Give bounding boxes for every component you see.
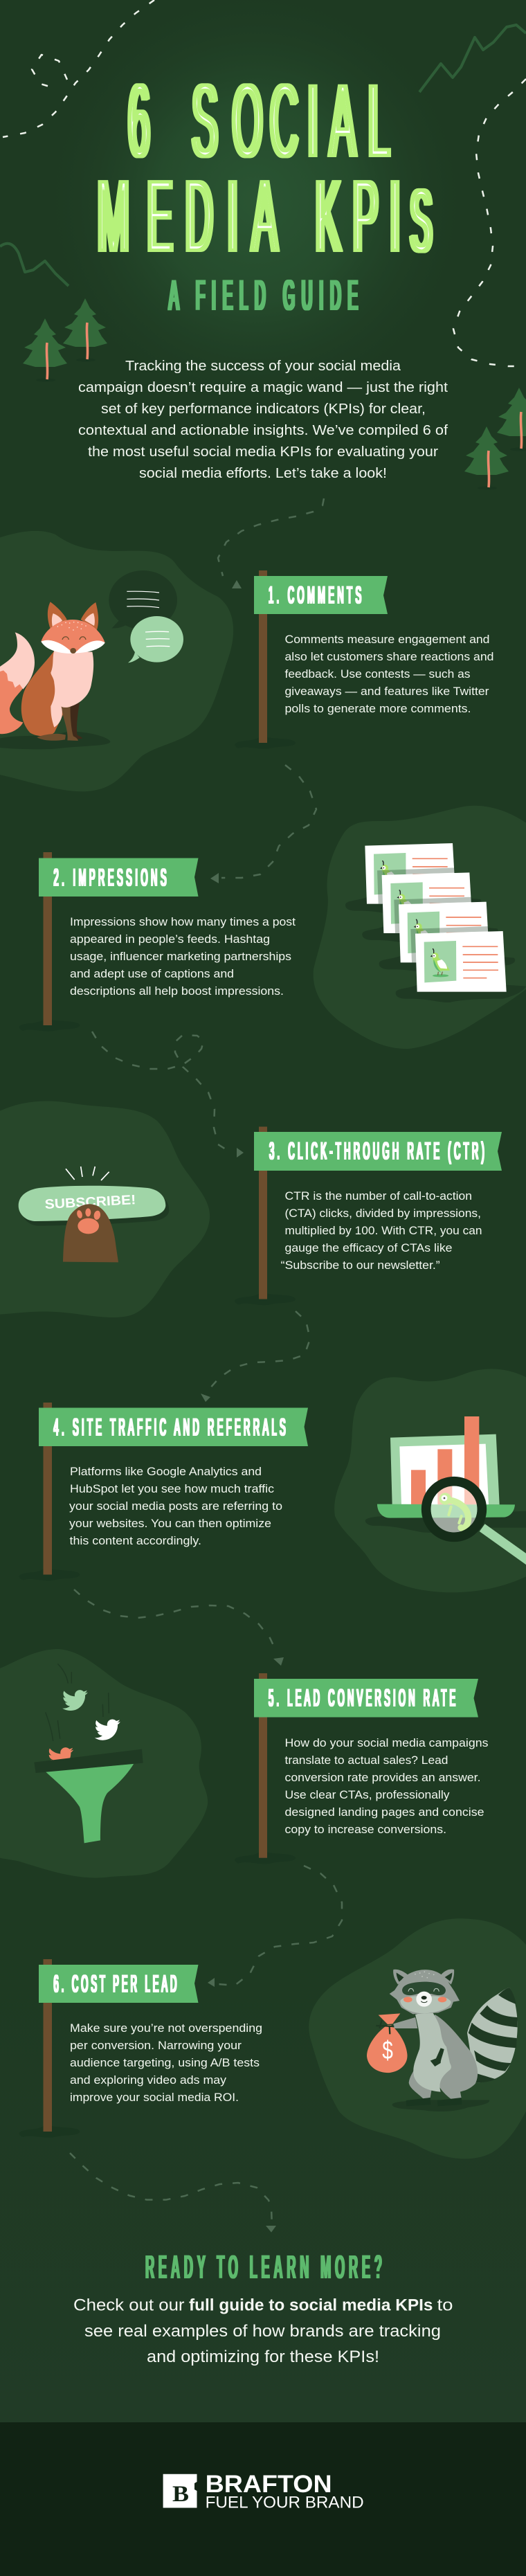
heading ribbon: impressions — [39, 858, 198, 897]
text block: impressions: usage, influencer marketing partnerships — [70, 950, 291, 963]
text block: comments: Comments measure engagement and — [285, 633, 490, 646]
text block: lead conversion rate: designed landing pages and concise — [285, 1805, 484, 1819]
signpost — [19, 1403, 80, 1580]
signpost — [235, 570, 296, 749]
text block: site traffic: this content accordingly. — [69, 1534, 201, 1547]
footer band — [0, 2422, 526, 2576]
call to action text: full guide to social media KPIs — [189, 2296, 433, 2315]
blob: fox background — [0, 531, 233, 791]
subtitle: A FIELD GUIDE — [169, 271, 358, 318]
text block: comments: giveaways — and features like Twitter — [285, 685, 489, 698]
panel: comments — [0, 531, 494, 791]
dashed trail: right — [453, 79, 526, 366]
text block: click-through rate: multiplied by 100. With CTR, you can — [285, 1224, 482, 1237]
icon: raccoon holding money bag: $ — [382, 2035, 393, 2064]
heading ribbon: click-through rate: 3. CLICK-THROUGH RATE (CTR) — [269, 1139, 484, 1164]
icon: paw pressing subscribe button: SUBSCRIBE! — [44, 1193, 136, 1212]
text block: lead conversion rate: conversion rate provides an answer. — [285, 1771, 480, 1784]
text block: click-through rate: gauge the efficacy of CTAs like — [285, 1241, 453, 1254]
panel: lead conversion rate — [0, 1649, 489, 1877]
blob: cards background — [314, 806, 526, 1049]
arrow: comments to impressions — [210, 765, 316, 883]
call to action text: and optimizing for these KPIs! — [147, 2348, 379, 2366]
arrow: impressions to click-through rate — [92, 1032, 244, 1158]
text block: cost per lead: audience targeting, using A/B tests — [70, 2056, 260, 2069]
blob: paw background — [0, 1101, 210, 1317]
call to action text — [73, 2296, 453, 2366]
panel: site traffic and referrals — [19, 1369, 526, 1592]
signpost — [19, 1959, 80, 2138]
heading ribbon: comments: 1. COMMENTS — [269, 583, 361, 609]
heading ribbon: site traffic: 4. SITE TRAFFIC AND REFERRALS — [54, 1415, 286, 1441]
intro text block: Tracking the success of your social media — [125, 359, 401, 374]
text block: cost per lead: Make sure you’re not overspending — [70, 2021, 262, 2035]
arrow: cost per lead to call to action — [70, 2153, 276, 2233]
text block: lead conversion rate: translate to actual sales? Lead — [285, 1754, 448, 1767]
logo: Brafton — [163, 2471, 364, 2512]
text block: comments — [285, 633, 494, 715]
text block: lead conversion rate: copy to increase conversions. — [285, 1823, 446, 1836]
text block: click-through rate — [281, 1189, 482, 1272]
icon: raccoon holding money bag — [367, 1969, 518, 2111]
heading ribbon: cost per lead: 6. COST PER LEAD — [54, 1972, 176, 1997]
text block: impressions — [70, 915, 296, 998]
heading ribbon: site traffic — [39, 1408, 308, 1446]
icon: tree left — [23, 318, 67, 382]
arrow: lead conversion to cost per lead — [208, 1866, 342, 1987]
panel: click-through rate — [0, 1101, 502, 1317]
title: 6 SOCIAL — [128, 63, 390, 179]
text block: comments: also let customers share reactions and — [285, 650, 494, 663]
dashed trail: top left — [3, 0, 154, 137]
text block: cost per lead: and exploring video ads may — [70, 2073, 227, 2087]
icon: laptop chart with magnifier and chameleon — [365, 1416, 526, 1562]
logo: Brafton: B — [172, 2482, 189, 2507]
arrow: intro to comments — [218, 498, 324, 588]
text block: site traffic: Platforms like Google Analytics and — [70, 1465, 262, 1478]
signpost — [19, 852, 80, 1032]
text block: cost per lead: per conversion. Narrowing your — [70, 2039, 242, 2052]
icon: twitter birds falling into funnel — [34, 1664, 143, 1843]
icon: tree right — [464, 426, 509, 490]
intro text block: the most useful social media KPIs for evaluating your — [88, 444, 438, 460]
text block: site traffic: your social media posts are referring to — [69, 1499, 282, 1513]
text block: cost per lead: improve your social media ROI. — [70, 2091, 239, 2104]
text block: site traffic: HubSpot let you see how much traffic — [70, 1482, 275, 1495]
logo: Brafton: BRAFTON — [206, 2471, 332, 2498]
text block: impressions: and adept use of captions and — [70, 967, 234, 980]
title: MEDIA KPI — [98, 159, 400, 273]
text block: comments: polls to generate more comments. — [285, 702, 471, 715]
intro text block: contextual and actionable insights. We’ve compiled 6 of — [78, 423, 448, 438]
heading ribbon: comments — [254, 576, 388, 614]
call to action text: to — [437, 2296, 453, 2315]
call to action text: Check out our — [73, 2296, 184, 2315]
heading: ready to learn more: READY TO LEARN MORE? — [145, 2248, 382, 2286]
icon: tree left back — [63, 298, 107, 361]
text block: comments: feedback. Use contests — such as — [285, 667, 471, 681]
intro text block: campaign doesn’t require a magic wand — just the right — [78, 380, 448, 395]
text block: site traffic — [69, 1465, 282, 1547]
panel: cost per lead — [19, 1918, 526, 2159]
heading ribbon: lead conversion rate: 5. LEAD CONVERSION RATE — [269, 1686, 455, 1711]
blob: raccoon background — [309, 1918, 526, 2159]
icon: stacked post cards — [345, 843, 526, 1002]
text block: impressions: Impressions show how many times a post — [70, 915, 296, 928]
text block: impressions: appeared in people’s feeds. Hashtag — [70, 933, 270, 946]
blob: funnel background — [0, 1649, 208, 1877]
title: s — [410, 145, 432, 276]
icon: fox with speech bubbles — [0, 570, 183, 749]
text block: lead conversion rate — [285, 1736, 489, 1836]
text block: impressions: descriptions all help boost impressions. — [70, 984, 284, 998]
text block: click-through rate: CTR is the number of call-to-action — [285, 1189, 472, 1203]
heading ribbon: click-through rate — [254, 1132, 502, 1171]
intro text block — [78, 359, 448, 481]
signpost — [235, 1127, 296, 1305]
text block: click-through rate: “Subscribe to our newsletter.” — [281, 1259, 440, 1272]
mountain line: left — [0, 244, 69, 286]
text block: site traffic: your websites. You can then optimize — [69, 1517, 271, 1530]
call to action text: see real examples of how brands are tracking — [84, 2322, 441, 2341]
icon: paw pressing subscribe button — [19, 1167, 169, 1262]
text block: lead conversion rate: How do your social media campaigns — [285, 1736, 489, 1749]
heading ribbon: cost per lead — [39, 1965, 198, 2003]
text block: cost per lead — [70, 2021, 262, 2104]
intro text block: set of key performance indicators (KPIs) for clear, — [101, 402, 426, 417]
icon: tree right edge — [497, 388, 526, 451]
signpost — [235, 1673, 296, 1864]
arrow: site traffic to lead conversion — [74, 1589, 284, 1666]
heading ribbon: impressions: 2. IMPRESSIONS — [54, 865, 167, 891]
text block: click-through rate: (CTA) clicks, divided by impressions, — [285, 1207, 481, 1220]
arrow: click-through rate to site traffic — [201, 1311, 310, 1402]
title — [98, 63, 432, 276]
text block: lead conversion rate: Use clear CTAs, professionally — [285, 1788, 450, 1801]
panel: impressions — [19, 806, 526, 1049]
intro text block: social media efforts. Let’s take a look! — [139, 466, 387, 481]
mountain line: top right — [419, 25, 526, 92]
heading ribbon: lead conversion rate — [254, 1679, 478, 1717]
blob: analytics background — [334, 1369, 526, 1592]
logo: Brafton: FUEL YOUR BRAND — [206, 2494, 364, 2512]
